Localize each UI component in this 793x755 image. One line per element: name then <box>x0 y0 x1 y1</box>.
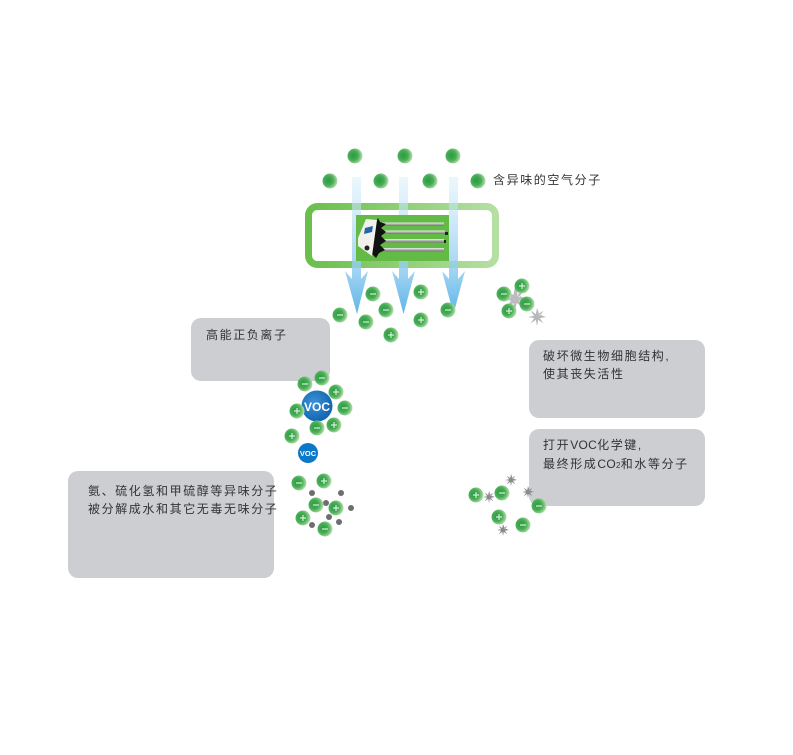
panel: VOC text box <box>529 429 705 506</box>
panel: ion label box <box>191 318 330 381</box>
panel: microbe text box <box>529 340 705 418</box>
text: odor decomposition <box>88 483 278 516</box>
icon: small VOC: VOC <box>300 449 317 458</box>
air molecules <box>322 148 486 188</box>
text: microbe destruction: 使其丧失活性 <box>543 366 625 381</box>
label: high energy ions: 高能正负离子 <box>206 327 288 342</box>
text: odor decomposition: 氨、硫化氢和甲硫醇等异味分子 <box>88 483 278 498</box>
arrow 1 <box>345 177 368 314</box>
arrow 3 <box>442 177 465 314</box>
decomposed molecules cluster <box>292 474 354 536</box>
text: odor decomposition: 被分解成水和其它无毒无味分子 <box>88 501 278 516</box>
airflow arrows <box>345 177 465 314</box>
icon: large VOC: VOC <box>304 400 330 414</box>
panel: odor text box <box>68 471 274 578</box>
text: VOC bond breaking <box>543 437 689 471</box>
text: microbe destruction: 破坏微生物细胞结构, <box>543 348 670 363</box>
VOC molecule with ions <box>284 370 352 463</box>
text: VOC bond breaking: 打开VOC化学键, <box>543 437 643 452</box>
green duct frame <box>308 206 496 264</box>
text: VOC bond breaking: 最终形成CO2和水等分子 <box>543 456 689 471</box>
ions below arrows <box>332 284 456 342</box>
icon: ion tube device <box>358 218 448 258</box>
arrow 2 <box>392 177 415 314</box>
broken bonds cluster <box>468 474 546 536</box>
label: air with odor: 含异味的空气分子 <box>493 172 602 187</box>
microbe being destroyed cluster <box>496 278 546 326</box>
text: microbe destruction <box>543 348 670 381</box>
device panel <box>356 215 449 261</box>
